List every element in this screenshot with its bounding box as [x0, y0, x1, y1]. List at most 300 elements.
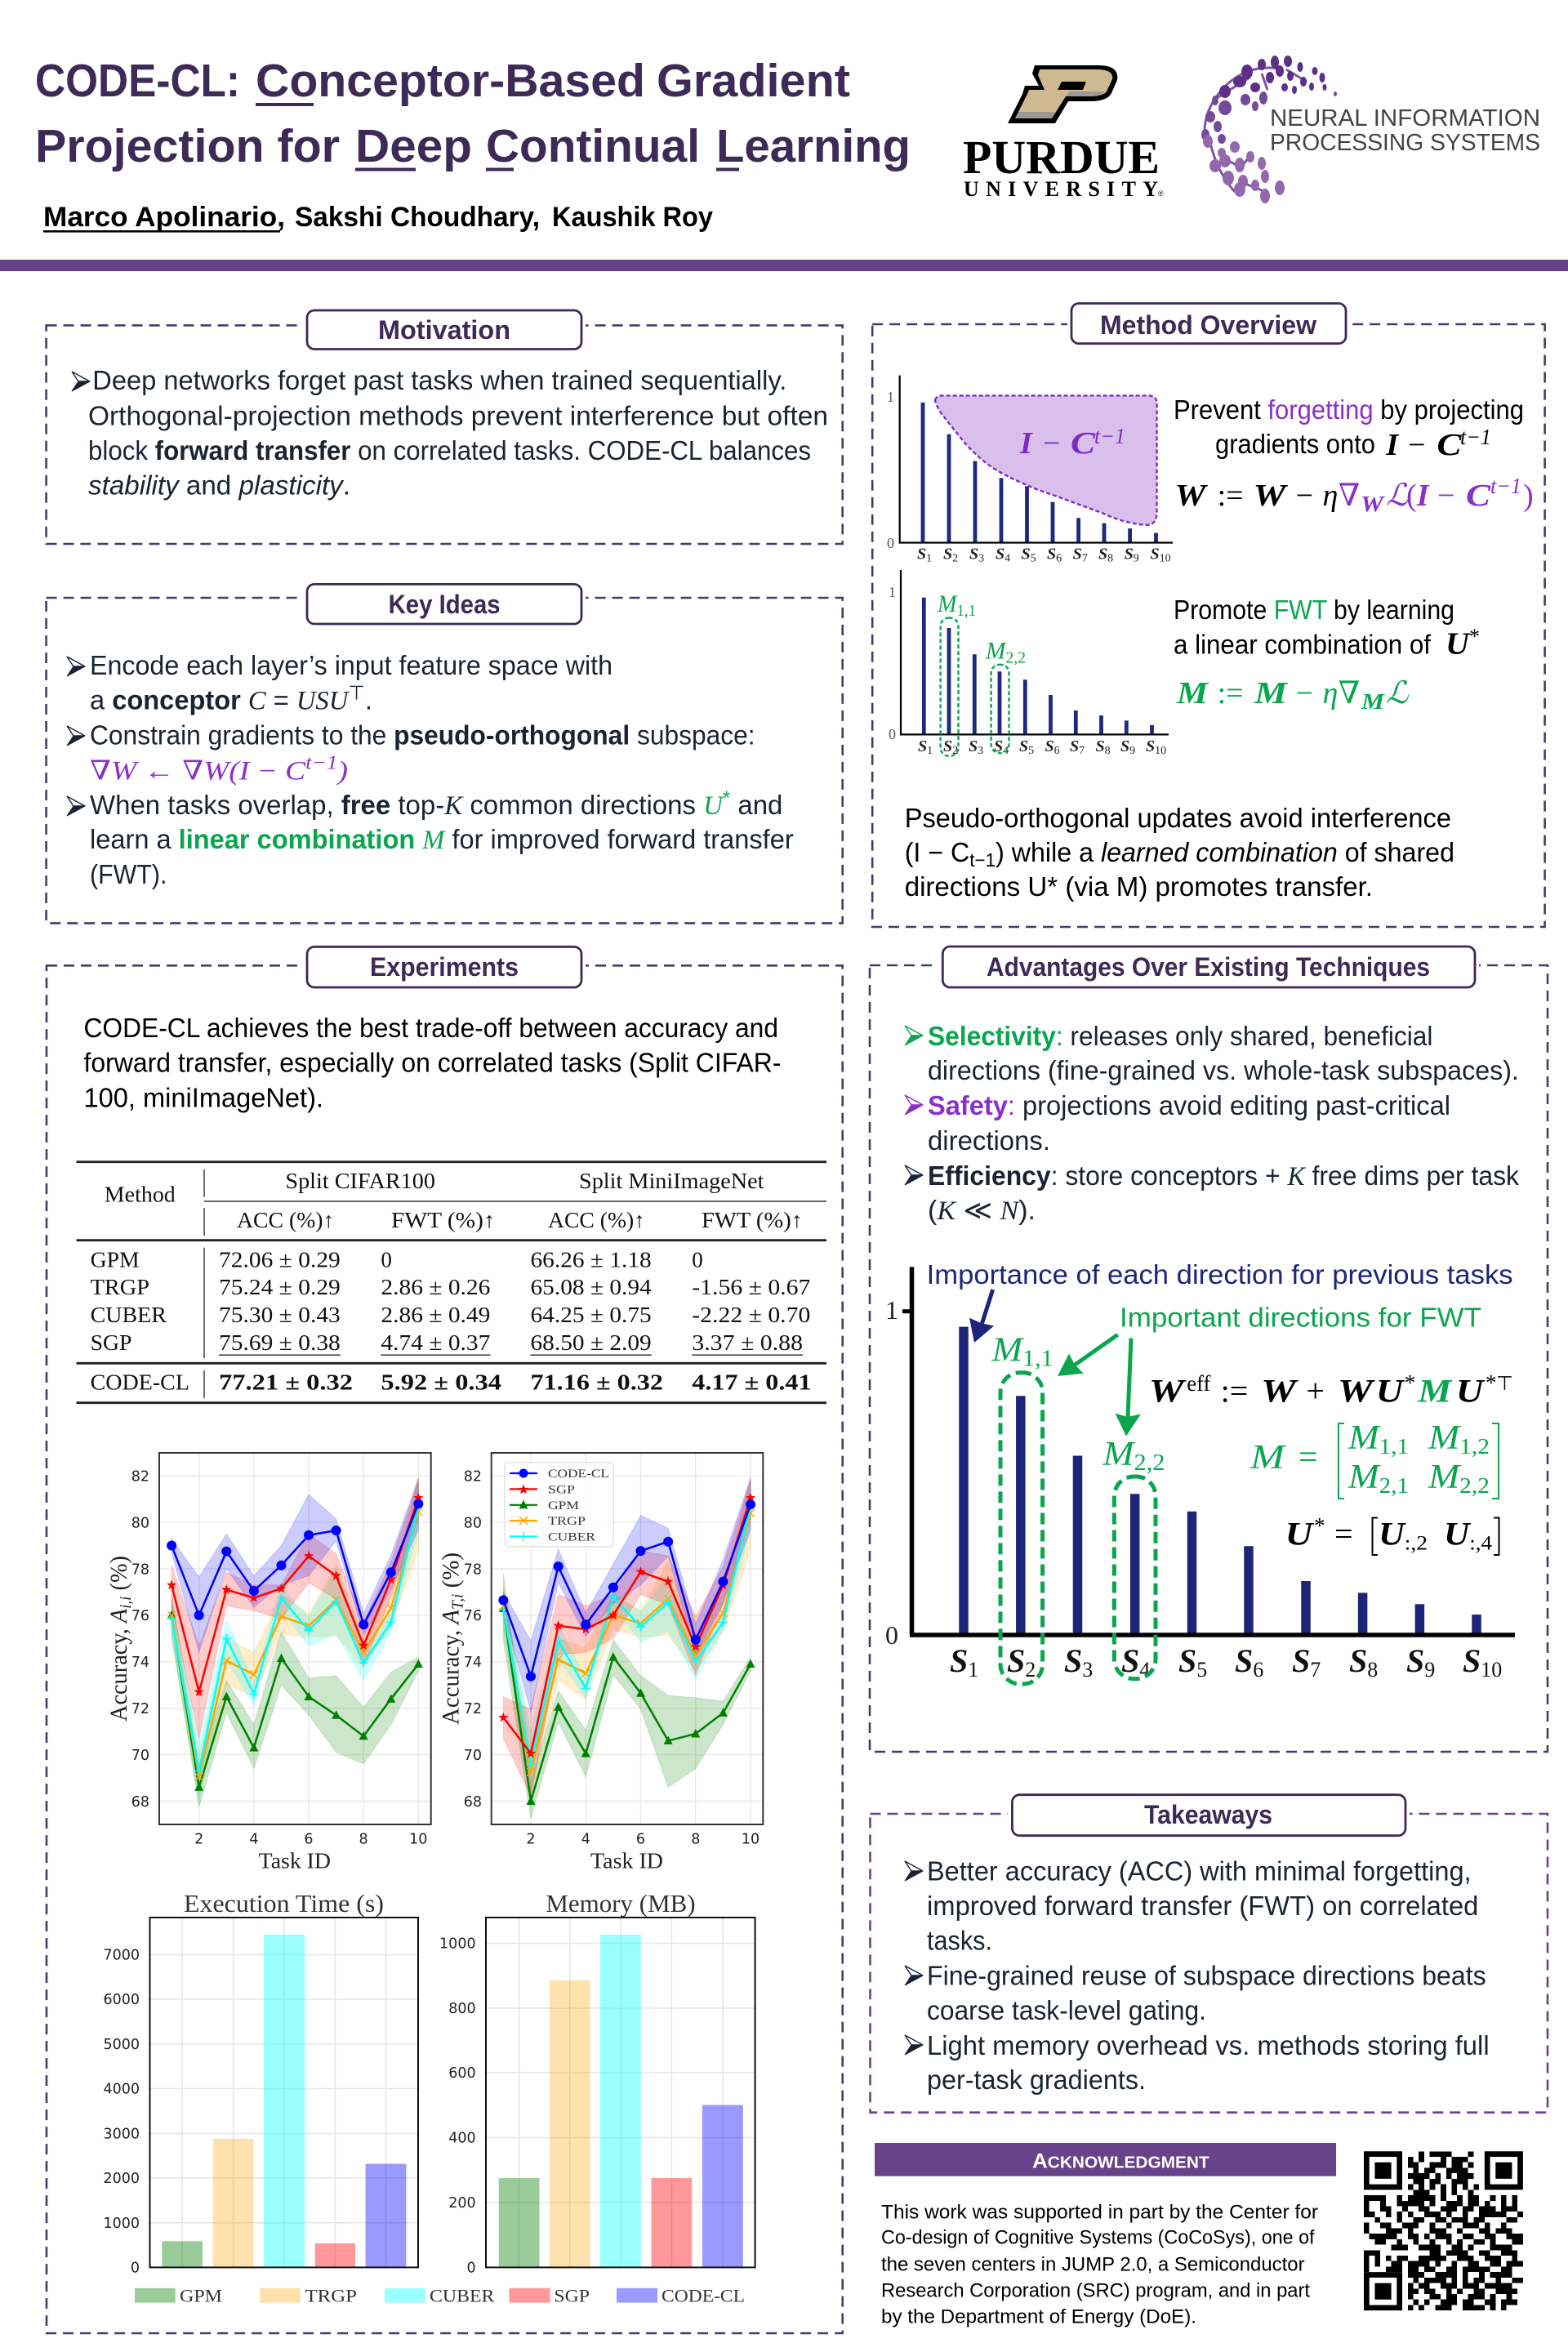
chart: singular values with learned directions: S: [918, 737, 927, 755]
text: acknowledgment body: Research Corporation (SRC) program, and in part: [881, 2279, 1310, 2301]
chart: importance of directions: 2,2: [1134, 1450, 1165, 1476]
chart: importance of directions: S: [1235, 1642, 1253, 1679]
poster title: [35, 55, 911, 172]
line chart: accuracy A(i,i) per task: Task ID: [259, 1849, 331, 1873]
chart legend: [505, 1463, 613, 1547]
line chart: accuracy A(T,i) per task with legend: 72: [464, 1701, 482, 1717]
text: prevent forgetting formula: [1174, 394, 1534, 516]
text: prevent forgetting formula: W: [1174, 479, 1209, 513]
chart: singular values with projected region: 4: [1004, 552, 1010, 564]
bar chart: memory: 1000: [439, 1936, 476, 1953]
text: promote FWT formula: *: [1469, 625, 1480, 648]
formula: U star: U: [1379, 1515, 1402, 1552]
chart: importance of directions: 1,1: [1022, 1346, 1054, 1371]
bar chart legend: CODE-CL: [662, 2286, 745, 2306]
text: prevent forgetting formula: ∇: [1339, 479, 1360, 513]
label: important directions for FWT with arrows: Important directions for FWT: [1120, 1303, 1481, 1333]
chart: importance of directions: S: [1121, 1642, 1139, 1679]
text: method summary: Pseudo-orthogonal updates avoid interference: [905, 803, 1451, 833]
text: promote FWT formula: Promote FWT by learning: [1174, 595, 1454, 625]
formula: effective weights: ⊤: [1496, 1372, 1513, 1395]
chart: singular values with learned directions: 9: [1129, 745, 1135, 757]
formula: effective weights: *: [1405, 1370, 1415, 1395]
text: takeaways bullets: per-task gradients.: [927, 2065, 1146, 2095]
chart: singular values with projected region: 2: [952, 552, 958, 564]
chart: importance of directions: S: [1349, 1642, 1367, 1679]
chart: singular values with projected region: C: [1071, 426, 1096, 461]
formula: matrix M: 2,2: [1459, 1473, 1490, 1498]
table: results comparison: Method: [105, 1183, 176, 1207]
text: method summary: t−1: [969, 849, 996, 871]
text: promote FWT formula: ℒ: [1386, 676, 1410, 710]
text: prevent forgetting formula: (: [1406, 479, 1417, 513]
label: importance of each direction with arrow: Importance of each direction for previous tasks: [927, 1259, 1513, 1290]
chart: singular values with learned directions: S: [1146, 737, 1155, 755]
bar chart: memory: 600: [448, 2065, 476, 2082]
text: promote FWT formula: :=: [1218, 676, 1244, 710]
logo: Neural Information Processing Systems: NEURAL INFORMATION: [1270, 105, 1540, 131]
heading: motivation: [307, 310, 581, 350]
text: prevent forgetting formula: W: [1253, 479, 1289, 513]
heading: acknowledgment banner: [875, 2143, 1336, 2176]
chart: singular values with learned directions: 0: [889, 726, 896, 742]
heading: takeaways: [1012, 1795, 1405, 1836]
chart: singular values with learned directions: 2,2: [1006, 648, 1026, 666]
line chart: accuracy A(i,i) per task: 8: [359, 1832, 368, 1848]
table: results comparison: 75.30 ± 0.43: [219, 1303, 341, 1327]
header: title, authors and logos: [35, 55, 1540, 233]
logo: Purdue University: ®: [1158, 189, 1164, 198]
text: prevent forgetting formula: t−1: [1490, 474, 1521, 498]
logo: Purdue University: UNIVERSITY: [964, 177, 1158, 201]
text: key ideas bullets: (FWT).: [90, 859, 167, 889]
text: key ideas bullets: and: [730, 790, 782, 820]
text: prevent forgetting formula: W: [1361, 492, 1385, 516]
bar chart legend: SGP: [554, 2286, 590, 2306]
formula: matrix M: 1,1: [1379, 1434, 1409, 1459]
table: results comparison: 65.08 ± 0.94: [531, 1275, 652, 1299]
formula: matrix M: M: [1428, 1419, 1457, 1457]
line chart: accuracy A(i,i) per task: 82: [131, 1468, 149, 1485]
chart legend: CUBER: [548, 1530, 595, 1544]
chart: singular values with learned directions: S: [943, 737, 952, 755]
table: results comparison: 68.50 ± 2.09: [531, 1330, 652, 1355]
bar chart: memory: [439, 1889, 755, 2276]
chart: singular values with learned directions: S: [969, 737, 978, 755]
chart: singular values with projected region: S: [1125, 545, 1134, 563]
panel: experiments: [47, 947, 843, 2333]
bar chart legend: TRGP: [305, 2286, 357, 2306]
text: key ideas bullets: a conceptor C = USU: [90, 685, 349, 716]
text: takeaways bullets: Light memory overhead vs. methods storing full: [927, 2030, 1490, 2060]
text: promote FWT formula: −: [1296, 676, 1313, 710]
text: experiments summary: CODE-CL achieves the best trade-off between accuracy and: [83, 1013, 778, 1043]
poster title: Conceptor-Based: [256, 55, 645, 107]
chart: importance of directions: M: [1102, 1436, 1132, 1473]
chart: singular values with projected region: 1: [926, 552, 932, 564]
text: advantages bullets: Selectivity: releases only shared, beneficial: [928, 1021, 1432, 1051]
bar chart: memory: Memory (MB): [546, 1889, 696, 1918]
formula: effective weights: W: [1338, 1372, 1375, 1409]
table: results comparison: 66.26 ± 1.18: [531, 1248, 652, 1272]
table: results comparison: CODE-CL: [91, 1370, 189, 1395]
line chart: accuracy A(i,i) per task: 68: [131, 1794, 149, 1811]
poster title: CODE-CL:: [35, 55, 240, 107]
chart: singular values with projected region: S: [1021, 545, 1031, 563]
line chart: accuracy A(i,i) per task: [105, 1453, 431, 1873]
chart: singular values with projected region: t−1: [1094, 424, 1125, 448]
chart: importance of directions: S: [1463, 1642, 1481, 1679]
table: results comparison: ACC (%)↑: [548, 1208, 645, 1232]
table: results comparison: 2.86 ± 0.49: [381, 1303, 490, 1327]
text: takeaways bullets: tasks.: [927, 1926, 992, 1956]
text: takeaways bullets: Better accuracy (ACC) with minimal forgetting,: [927, 1856, 1472, 1886]
line chart: accuracy A(T,i) per task with legend: 4: [581, 1832, 590, 1848]
table: results comparison: [77, 1162, 826, 1403]
bar chart: execution time: 3000: [103, 2127, 140, 2143]
formula: matrix M: M: [1348, 1419, 1377, 1457]
header divider bar: [0, 260, 1568, 271]
text: key ideas bullets: *: [723, 787, 730, 809]
table: results comparison: -1.56 ± 0.67: [692, 1275, 810, 1299]
text: prevent forgetting formula: gradients onto: [1215, 429, 1375, 459]
chart: singular values with learned directions: S: [1120, 737, 1129, 755]
text: key ideas bullets: learn a linear combination M for improved forward transfer: [90, 824, 794, 855]
line chart: accuracy A(i,i) per task: 78: [131, 1561, 149, 1578]
heading: key ideas: Key Ideas: [389, 590, 501, 619]
text: method summary: directions U* (via M) promotes transfer.: [905, 871, 1373, 902]
text: advantages bullets: Efficiency: store conceptors + K free dims per task: [928, 1160, 1519, 1192]
chart: importance of directions: 7: [1310, 1658, 1321, 1682]
text: prevent forgetting formula: C: [1466, 479, 1491, 513]
formula: matrix M: [1250, 1419, 1499, 1499]
heading: method overview: [1071, 304, 1346, 344]
line chart: accuracy A(T,i) per task with legend: [438, 1453, 764, 1873]
text: promote FWT formula: M: [1176, 676, 1209, 710]
chart: singular values with projected region: −: [1043, 426, 1060, 461]
heading: acknowledgment banner: ACKNOWLEDGMENT: [1032, 2149, 1209, 2172]
text: prevent forgetting formula: t−1: [1460, 425, 1491, 449]
text: acknowledgment body: Co-design of Cognitive Systems (CoCoSys), one of: [881, 2227, 1315, 2249]
formula: U star: U: [1285, 1515, 1315, 1552]
text: takeaways bullets: Fine-grained reuse of subspace directions beats: [927, 1961, 1486, 1991]
heading: advantages: [942, 947, 1475, 987]
label: importance of each direction with arrow: [927, 1259, 1513, 1343]
text: prevent forgetting formula: :=: [1218, 479, 1244, 513]
chart: singular values with learned directions: 1: [927, 745, 933, 757]
text: experiments summary: [83, 1013, 781, 1113]
poster title: Learning: [716, 120, 911, 172]
chart: singular values with learned directions: 5: [1028, 745, 1034, 757]
bar chart legend: [135, 2286, 745, 2306]
chart legend: SGP: [548, 1483, 575, 1496]
line chart: accuracy A(T,i) per task with legend: 76: [464, 1608, 482, 1624]
table: results comparison: 0: [692, 1248, 703, 1272]
text: key ideas bullets: ): [336, 756, 348, 786]
table: results comparison: ACC (%)↑: [237, 1208, 334, 1232]
text: promote FWT formula: a linear combination of: [1174, 629, 1432, 659]
line chart: accuracy A(i,i) per task: 80: [131, 1515, 149, 1531]
line chart: accuracy A(T,i) per task with legend: Task ID: [590, 1849, 663, 1873]
chart: importance of directions: 8: [1367, 1658, 1378, 1682]
chart: singular values with learned directions: 10: [1155, 745, 1166, 757]
bar chart: memory: 400: [448, 2130, 476, 2146]
text: prevent forgetting formula: I: [1385, 428, 1399, 462]
chart: singular values with learned directions: [889, 570, 1169, 757]
formula: effective weights: W: [1261, 1372, 1298, 1409]
formula: effective weights: *: [1486, 1370, 1496, 1395]
text: method summary: ) while a: [996, 837, 1101, 867]
chart: singular values with projected region: S: [917, 545, 926, 563]
authors: Kaushik Roy: [552, 202, 713, 233]
formula: effective weights: M: [1417, 1372, 1453, 1409]
text: prevent forgetting formula: Prevent forgetting by projecting: [1174, 394, 1524, 425]
text: motivation body: stability and plasticity.: [88, 470, 350, 500]
text: promote FWT formula: η: [1323, 676, 1338, 710]
chart: importance of directions: 10: [1481, 1658, 1502, 1682]
text: advantages bullets: directions.: [928, 1125, 1050, 1156]
chart legend: GPM: [548, 1499, 579, 1512]
text: promote FWT formula: M: [1361, 689, 1385, 714]
label: important directions for FWT with arrows: [1058, 1303, 1481, 1437]
table: results comparison: 0: [381, 1248, 392, 1272]
text: promote FWT formula: ∇: [1339, 676, 1360, 710]
bar chart: execution time: 2000: [103, 2171, 140, 2187]
formula: matrix M: M: [1250, 1439, 1286, 1477]
chart legend: TRGP: [548, 1515, 586, 1528]
table: results comparison: Split CIFAR100: [285, 1169, 435, 1193]
text: key ideas bullets: Encode each layer’s input feature space with: [90, 650, 612, 680]
authors: Marco Apolinario,: [43, 202, 285, 233]
table: results comparison: CUBER: [91, 1303, 167, 1327]
chart: singular values with learned directions: S: [1019, 737, 1028, 755]
text: prevent forgetting formula: ): [1523, 479, 1534, 513]
line chart: accuracy A(T,i) per task with legend: 10: [742, 1832, 760, 1848]
chart: importance of directions: S: [1007, 1642, 1025, 1679]
chart: singular values with learned directions: 6: [1054, 745, 1060, 757]
poster title: Continual: [486, 120, 700, 172]
bar chart: execution time: 4000: [103, 2081, 140, 2097]
chart: singular values with learned directions: 1,1: [957, 602, 976, 620]
chart: singular values with projected region: 10: [1160, 552, 1171, 564]
chart: importance of directions: M: [992, 1331, 1021, 1369]
chart: singular values with learned directions: S: [1045, 737, 1054, 755]
line chart: accuracy A(i,i) per task: 76: [131, 1608, 149, 1624]
line chart: accuracy A(i,i) per task: 10: [409, 1832, 427, 1848]
line chart: accuracy A(T,i) per task with legend: 82: [464, 1468, 482, 1485]
chart: singular values with learned directions: M: [986, 637, 1006, 664]
bar chart: memory: 200: [448, 2195, 476, 2212]
chart: importance of directions: 4: [1139, 1658, 1150, 1682]
formula: effective weights: [1149, 1370, 1513, 1409]
line chart: accuracy A(i,i) per task: i,i: [117, 1597, 135, 1609]
formula: effective weights: U: [1376, 1372, 1405, 1409]
chart: singular values with projected region: S: [1150, 545, 1160, 563]
table: results comparison: 2.86 ± 0.26: [381, 1275, 490, 1299]
chart: singular values with projected region: 3: [978, 552, 984, 564]
chart: singular values with projected region: 1: [887, 389, 894, 405]
text: advantages bullets: (K ≪ N).: [928, 1195, 1036, 1226]
icon: QR code: [1364, 2151, 1523, 2310]
chart: importance of directions: S: [950, 1642, 968, 1679]
chart: singular values with projected region: S: [996, 545, 1004, 563]
authors: [43, 202, 713, 233]
chart: singular values with projected region: 0: [887, 535, 894, 551]
formula: matrix M: 1,2: [1459, 1434, 1490, 1459]
chart: singular values with learned directions: 4: [1003, 745, 1009, 757]
formula: effective weights: +: [1306, 1372, 1325, 1409]
line chart: accuracy A(i,i) per task: 2: [194, 1832, 203, 1848]
logo: Neural Information Processing Systems: PROCESSING SYSTEMS: [1270, 130, 1540, 156]
bar chart: memory: 800: [448, 2001, 476, 2017]
text: acknowledgment body: by the Department of Energy (DoE).: [881, 2305, 1196, 2328]
logo: Purdue University: [963, 65, 1164, 201]
chart legend: CODE-CL: [548, 1468, 609, 1481]
formula: effective weights: U: [1456, 1372, 1486, 1409]
text: prevent forgetting formula: I: [1416, 479, 1430, 513]
line chart: accuracy A(T,i) per task with legend: 8: [691, 1832, 700, 1848]
table: results comparison: 3.37 ± 0.88: [692, 1330, 803, 1355]
formula: U star: =: [1334, 1515, 1353, 1552]
bar chart legend: GPM: [180, 2286, 222, 2306]
formula: matrix M: M: [1428, 1459, 1457, 1496]
text: acknowledgment body: [881, 2202, 1318, 2328]
text: key ideas bullets: Constrain gradients to the pseudo-orthogonal subspace:: [90, 720, 755, 751]
text: prevent forgetting formula: η: [1323, 479, 1338, 513]
heading: key ideas: [307, 584, 581, 624]
heading: motivation: Motivation: [378, 315, 510, 345]
chart: importance of directions: S: [1292, 1642, 1310, 1679]
panel: advantages over existing techniques: [870, 947, 1548, 1752]
text: prevent forgetting formula: −: [1408, 428, 1425, 462]
text: promote FWT formula: M: [1254, 676, 1288, 710]
authors: Sakshi Choudhary,: [295, 202, 540, 233]
text: promote FWT formula: U: [1446, 626, 1472, 661]
table: results comparison: 64.25 ± 0.75: [531, 1303, 652, 1327]
bar chart: execution time: 7000: [103, 1948, 140, 1964]
heading: takeaways: Takeaways: [1144, 1800, 1272, 1829]
chart: singular values with projected region: S: [943, 545, 952, 563]
formula: U star: :,2: [1405, 1532, 1428, 1554]
chart: singular values with learned directions: M: [938, 590, 958, 617]
line chart: accuracy A(T,i) per task with legend: 74: [464, 1655, 482, 1671]
heading: method overview: Method Overview: [1100, 310, 1316, 340]
line chart: accuracy A(T,i) per task with legend: 78: [464, 1561, 482, 1578]
panel: motivation: [47, 310, 843, 544]
bar chart: execution time: 1000: [103, 2216, 140, 2232]
bar chart: execution time: Execution Time (s): [184, 1889, 384, 1918]
heading: experiments: Experiments: [370, 952, 519, 982]
text: advantages bullets: Safety: projections avoid editing past-critical: [928, 1090, 1450, 1120]
bar chart legend: CUBER: [430, 2286, 495, 2306]
text: prevent forgetting formula: −: [1296, 479, 1313, 513]
chart: singular values with projected region: 7: [1082, 552, 1088, 564]
text: method summary: [905, 803, 1454, 902]
chart: singular values with learned directions: S: [994, 737, 1003, 755]
table: results comparison: 4.74 ± 0.37: [381, 1330, 490, 1355]
text: motivation body: Deep networks forget past tasks when trained sequentially.: [92, 365, 786, 395]
text: acknowledgment body: the seven centers in JUMP 2.0, a Semiconductor: [881, 2253, 1305, 2275]
text: motivation body: [72, 365, 828, 500]
panel: method overview: [872, 304, 1545, 927]
text: prevent forgetting formula: ℒ: [1386, 479, 1410, 513]
chart: singular values with projected region: S: [1047, 545, 1056, 563]
formula: matrix M: =: [1298, 1439, 1318, 1477]
table: results comparison: GPM: [91, 1248, 140, 1272]
formula: effective weights: :=: [1221, 1372, 1248, 1409]
chart: importance of directions: 3: [1082, 1658, 1093, 1682]
line chart: accuracy A(i,i) per task: Accuracy, A: [105, 1608, 132, 1722]
logo: Purdue University: PURDUE: [963, 131, 1160, 184]
chart: importance of directions: [885, 1259, 1515, 1684]
chart: singular values with projected region: [887, 376, 1173, 564]
formula: U star: [1285, 1513, 1499, 1555]
line chart: accuracy A(T,i) per task with legend: Accuracy, A: [438, 1609, 465, 1725]
bar chart: execution time: [103, 1889, 418, 2276]
table: results comparison: 75.24 ± 0.29: [219, 1275, 341, 1299]
heading: advantages: Advantages Over Existing Techniques: [987, 952, 1430, 982]
text: takeaways bullets: coarse task-level gating.: [927, 1995, 1206, 2025]
text: experiments summary: forward transfer, especially on correlated tasks (Split CIFAR-: [83, 1048, 781, 1078]
text: key ideas bullets: ⊤: [348, 683, 365, 705]
table: results comparison: 77.21 ± 0.32: [219, 1370, 353, 1395]
table: results comparison: Split MiniImageNet: [579, 1169, 764, 1193]
line chart: accuracy A(i,i) per task: 72: [131, 1701, 149, 1717]
chart: importance of directions: S: [1064, 1642, 1082, 1679]
chart: singular values with projected region: S: [969, 545, 978, 563]
chart: singular values with projected region: 8: [1107, 552, 1113, 564]
chart: singular values with learned directions: 3: [978, 745, 983, 757]
table: results comparison: 5.92 ± 0.34: [381, 1370, 501, 1395]
bar chart: execution time: 5000: [103, 2037, 140, 2053]
line chart: accuracy A(T,i) per task with legend: 80: [464, 1515, 482, 1531]
chart: singular values with projected region: 9: [1134, 552, 1139, 564]
line chart: accuracy A(i,i) per task: 6: [304, 1832, 314, 1848]
line chart: accuracy A(T,i) per task with legend: 6: [636, 1832, 645, 1848]
text: acknowledgment body: This work was supported in part by the Center for: [881, 2202, 1318, 2224]
chart: singular values with learned directions: 7: [1079, 745, 1085, 757]
chart: importance of directions: 0: [885, 1620, 898, 1650]
chart: importance of directions: 1: [968, 1658, 978, 1682]
text: advantages bullets: [905, 1021, 1519, 1226]
chart: importance of directions: 2: [1025, 1658, 1036, 1682]
line chart: accuracy A(T,i) per task with legend: 68: [464, 1794, 482, 1811]
poster title: Gradient: [657, 55, 850, 107]
text: method summary: (I − C: [905, 837, 971, 867]
line chart: accuracy A(i,i) per task: 74: [131, 1655, 149, 1671]
chart: singular values with projected region: S: [1073, 545, 1082, 563]
chart: importance of directions: S: [1178, 1642, 1196, 1679]
chart: singular values with learned directions: 2: [952, 745, 958, 757]
panel: takeaways: [871, 1795, 1548, 2113]
chart: importance of directions: 5: [1196, 1658, 1207, 1682]
formula: U star: :,4: [1469, 1532, 1493, 1554]
chart: importance of directions: 9: [1424, 1658, 1435, 1682]
line chart: accuracy A(i,i) per task: 4: [249, 1832, 258, 1848]
line chart: accuracy A(T,i) per task with legend: T,i: [449, 1594, 467, 1610]
text: promote FWT formula: [1174, 595, 1480, 714]
text: key ideas bullets: When tasks overlap, free top-K common directions U: [90, 790, 723, 821]
panel: key ideas: [47, 584, 843, 923]
chart: importance of directions: S: [1406, 1642, 1424, 1679]
table: results comparison: 71.16 ± 0.32: [531, 1370, 663, 1395]
text: takeaways bullets: [905, 1856, 1490, 2095]
text: motivation body: block forward transfer on correlated tasks. CODE-CL balances: [88, 435, 811, 466]
table: results comparison: -2.22 ± 0.70: [692, 1303, 810, 1327]
table: results comparison: SGP: [91, 1330, 132, 1355]
table: results comparison: FWT (%)↑: [702, 1208, 803, 1232]
chart: singular values with learned directions: S: [1070, 737, 1079, 755]
